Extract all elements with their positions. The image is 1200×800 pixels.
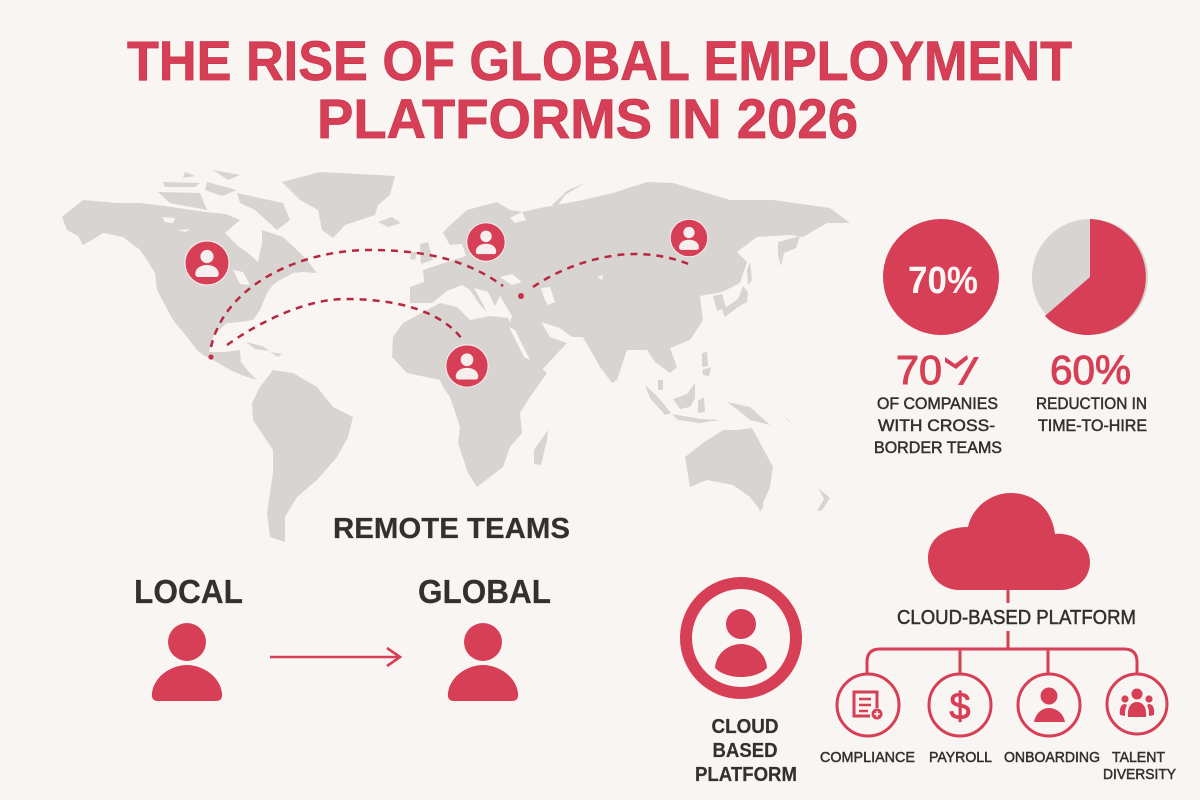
icon: payroll: $ — [949, 686, 971, 728]
icon: onboarding — [1018, 674, 1080, 736]
stat value: 70%: 70 — [896, 347, 942, 393]
map: korea — [713, 294, 726, 311]
map: inland seas and lakes — [162, 212, 603, 360]
title: PLATFORMS IN 2026 — [317, 87, 858, 150]
icon: cloud — [928, 493, 1090, 590]
label: onboarding: ONBOARDING — [1004, 749, 1100, 766]
map: caribbean — [246, 342, 282, 357]
label: cloud based platform: PLATFORM — [695, 764, 797, 786]
label: payroll: PAYROLL — [929, 749, 992, 766]
pin: europe — [467, 223, 505, 261]
map: eurasia — [410, 182, 850, 383]
map: novaya zemlya — [552, 183, 585, 208]
stat label: time to hire — [1036, 395, 1147, 435]
map: africa — [392, 303, 547, 487]
connector tree — [867, 590, 1137, 673]
map: new zealand — [817, 488, 830, 511]
label: compliance: COMPLIANCE — [820, 749, 915, 766]
label: talent diversity — [1103, 749, 1176, 783]
stat label: companies — [874, 395, 1002, 457]
pin: africa — [446, 345, 488, 387]
icon: talent diversity — [1107, 674, 1167, 734]
label: cloud based platform — [695, 716, 797, 786]
map: iceland — [378, 217, 401, 227]
stat label: companies: BORDER TEAMS — [874, 439, 1002, 457]
label: cloud based platform: CLOUD — [712, 716, 778, 738]
arrow — [270, 648, 400, 666]
icon: global person — [448, 623, 518, 701]
world map — [62, 170, 850, 542]
stat label: time to hire: TIME-TO-HIRE — [1038, 417, 1147, 435]
pin: north america — [185, 241, 229, 285]
stat label: companies: WITH CROSS- — [878, 417, 995, 435]
map: australia — [685, 428, 773, 512]
title — [127, 29, 1072, 150]
pin: asia — [670, 219, 708, 257]
stat value: 60%: 60% — [1050, 347, 1131, 393]
map: arctic islands — [158, 170, 290, 230]
heading: remote teams: REMOTE TEAMS — [333, 513, 570, 545]
icon: local person — [152, 623, 222, 701]
map: south america — [252, 370, 353, 542]
label: talent diversity: DIVERSITY — [1103, 766, 1176, 783]
stat label: companies: OF COMPANIES — [877, 395, 998, 413]
label: cloud-based platform: CLOUD-BASED PLATFORM — [897, 607, 1136, 629]
stat value: 70% — [896, 347, 979, 393]
label: local: LOCAL — [134, 573, 243, 610]
icon: payroll — [929, 674, 991, 736]
stat circle: 70%: 70% — [908, 260, 978, 302]
map: kamchatka and sakhalin — [747, 236, 800, 285]
label: global: GLOBAL — [418, 573, 551, 610]
label: talent diversity: TALENT — [1112, 749, 1165, 766]
stat label: time to hire: REDUCTION IN — [1036, 395, 1147, 413]
label: cloud based platform: BASED — [712, 740, 778, 762]
map: greenland — [282, 172, 395, 238]
map: madagascar — [534, 430, 548, 465]
connection arcs — [211, 250, 693, 347]
icon: person in ring — [686, 583, 796, 693]
origin dot: americas — [208, 354, 214, 360]
icon: compliance — [837, 674, 899, 736]
map: south east asia islands — [645, 352, 793, 425]
map: british isles — [410, 242, 433, 264]
stat circle: 70% — [883, 219, 999, 335]
origin dot: eurasia — [518, 293, 524, 299]
title: THE RISE OF GLOBAL EMPLOYMENT — [127, 29, 1072, 92]
pie chart: 60% — [1032, 219, 1148, 335]
map: japan — [722, 286, 748, 317]
map: north america — [62, 200, 317, 380]
